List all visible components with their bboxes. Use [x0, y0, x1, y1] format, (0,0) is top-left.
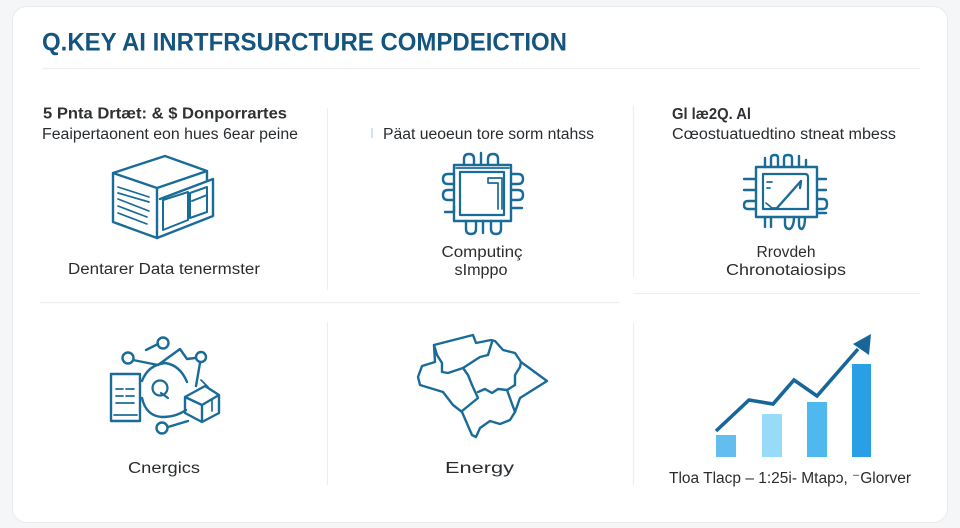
label: energy map: Energy — [445, 460, 514, 477]
title: Q.KEY AI INRTFRSURCTURE COMPDEICTION — [42, 28, 567, 56]
icon: data center building — [113, 156, 213, 238]
label: research chips — [726, 244, 846, 279]
panel: energy map — [418, 335, 547, 477]
label: computing chips — [442, 244, 523, 279]
accent mark — [371, 128, 373, 138]
label: data centers: Dentarer Data tenermster — [68, 261, 260, 278]
heading: research chips: Gl læ2Q. Al — [672, 106, 751, 123]
heading: data centers: 5 Pnta Drtæt: & $ Donporrartes — [43, 106, 287, 122]
label: computing chips: sImppo — [454, 262, 508, 279]
label: research chips: Rrovdeh — [756, 244, 816, 261]
subheading: research chips: Cœostuatuedtino stneat mbess — [672, 126, 896, 143]
icon: regional map — [418, 335, 547, 437]
icon: chip with trend line — [744, 155, 827, 229]
icon: network with server and cube — [111, 338, 219, 434]
label: research chips: Chronotaiosips — [726, 262, 846, 279]
label: energy network: Cnergics — [128, 460, 200, 477]
panel: energy network — [111, 338, 219, 477]
panel: data centers — [42, 106, 298, 278]
subheading: computing: Päat ueoeun tore sorm ntahss — [383, 126, 594, 143]
subheading: data centers: Feaipertaonent eon hues 6ear peine — [42, 126, 298, 143]
label: computing chips: Computinç — [442, 244, 523, 261]
panel: growth chart — [669, 334, 911, 487]
arrow: growth trend — [716, 334, 871, 431]
bar chart — [716, 364, 871, 457]
panel: computing chips — [371, 126, 594, 279]
label: growth chart: Tloa Tlacp – 1:25i- Mtapɔ, ⁻Glorver — [669, 470, 911, 487]
panel: research chips — [672, 106, 896, 279]
icon: processor chip — [443, 153, 523, 234]
